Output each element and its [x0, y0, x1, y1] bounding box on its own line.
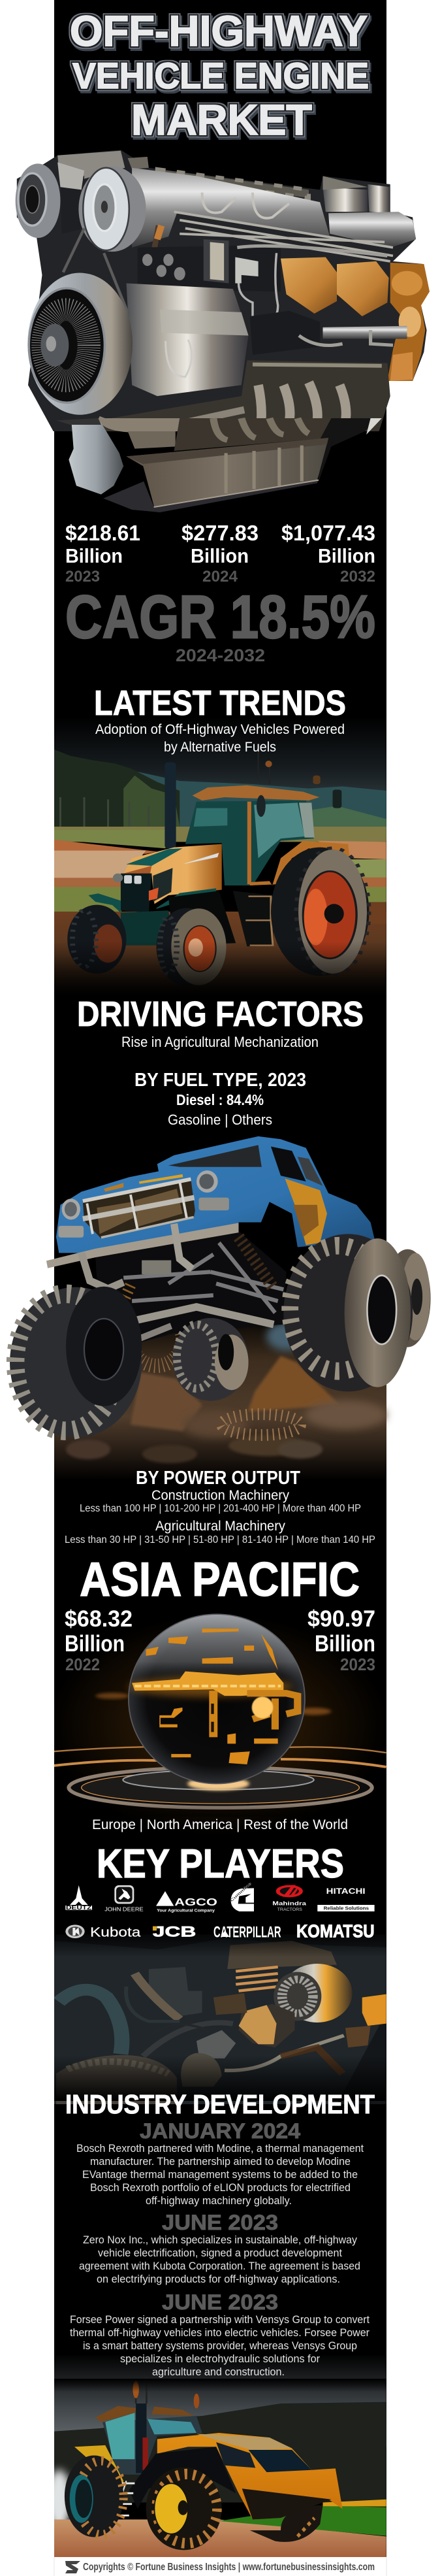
illustration: engine bay close-up: [54, 1928, 386, 2104]
logo: Cummins: [230, 1881, 254, 1911]
development: June 2023 Zero Nox: vehicle electrification, signed a product development: [98, 2247, 342, 2259]
logo: Hitachi: HITACHI: [326, 1887, 366, 1896]
development: January 2024: Bosch Rexroth portfolio of eLION products for electrified: [90, 2181, 351, 2194]
segment: power output: Construction Machinery: [151, 1488, 289, 1503]
stat: asia pacific 2023: Billion: [315, 1631, 375, 1657]
stat: 2032 value: [281, 521, 375, 586]
tractor scene fade: [54, 941, 386, 997]
centre wheel: [172, 1318, 249, 1401]
stat: 2023 value: 2023: [65, 568, 100, 586]
black background panel: [54, 0, 386, 2557]
illustration: yellow tractor on track: [46, 2354, 386, 2557]
heading: asia pacific: ASIA PACIFIC: [80, 1553, 360, 1606]
scene bottom fade: [54, 2055, 386, 2101]
development: June 2023 Zero Nox: Zero Nox Inc., which specializes in sustainable, off-highway: [83, 2234, 357, 2246]
scene top fade: [54, 1934, 386, 1954]
logo: Hitachi: Reliable Solutions: [324, 1907, 369, 1911]
logo: John Deere: [104, 1885, 144, 1913]
segment: fuel type: Diesel : 84.4%: [176, 1091, 264, 1108]
segment: power output: Less than 100 HP | 101-200 HP | 201-400 HP | More than 400 HP: [80, 1503, 361, 1514]
left wheel: [10, 1287, 142, 1438]
stat: asia pacific 2023: $90.97: [307, 1606, 375, 1632]
heading: driving factors: DRIVING FACTORS: [77, 995, 364, 1034]
stat: asia pacific 2023: [307, 1606, 375, 1674]
logo: Caterpillar: CATERPILLAR: [213, 1923, 281, 1941]
development: June 2023 Forsee Power: is a smart battery systems provider, whereas Vensys Group: [83, 2339, 357, 2352]
development: January 2024: Bosch Rexroth partnered with Modine, a thermal management: [76, 2142, 364, 2155]
latest trends subtitle: [95, 722, 345, 755]
title: OFF-HIGHWAY: [70, 7, 368, 55]
rear far wheel: [385, 1249, 431, 1347]
segment: fuel type: [134, 1070, 306, 1128]
logo: AGCO: AGCO: [174, 1897, 217, 1908]
stat: asia pacific 2023: 2023: [340, 1655, 375, 1674]
stat: 2032 value: $1,077.43: [281, 521, 375, 545]
development: June 2023 Zero Nox: agreement with Kubota Corporation. The agreement is based: [79, 2260, 360, 2272]
segment: fuel type: Gasoline | Others: [168, 1112, 272, 1128]
CAGR period: 2024-2032: [176, 646, 265, 665]
logo: JCB: JCB: [153, 1924, 196, 1940]
company logos: [65, 1881, 375, 1941]
left pulley: [16, 163, 60, 238]
top pulley: [78, 167, 146, 252]
development: January 2024: JANUARY 2024: [140, 2119, 300, 2143]
stat: 2023 value: $218.61: [65, 521, 140, 545]
stat: 2024 value: 2024: [202, 568, 238, 586]
illustration: engine: [16, 150, 430, 512]
logo: Mahindra: Mahindra: [272, 1900, 306, 1906]
development: June 2023 Forsee Power: agriculture and construction.: [152, 2366, 285, 2378]
platform fade: [132, 1806, 309, 1810]
development: June 2023 Forsee Power: [70, 2290, 369, 2378]
right wheel: [283, 1234, 413, 1391]
heading: key players: KEY PLAYERS: [97, 1841, 344, 1887]
logo: Deutz: [65, 1885, 92, 1911]
stat: 2023 value: Billion: [65, 544, 123, 567]
logo: Kubota: [65, 1924, 141, 1940]
logo: Mahindra: TRACTORS: [277, 1908, 302, 1912]
stat: 2024 value: $277.83: [181, 521, 259, 545]
stat: asia pacific 2022: 2022: [65, 1655, 100, 1674]
footer: [54, 2557, 386, 2576]
logo: John Deere: JOHN DEERE: [104, 1906, 144, 1913]
development: January 2024: EVantage thermal management systems to be added to the: [82, 2168, 358, 2181]
stat: 2024 value: [181, 521, 259, 586]
illustration: monster truck: [10, 1136, 431, 1438]
driving factors subtitle: Rise in Agricultural Mechanization: [121, 1034, 319, 1050]
illustration: glowing globe: [49, 1614, 388, 1836]
front wheel: [146, 2468, 222, 2550]
stat: asia pacific 2022: Billion: [65, 1631, 125, 1657]
illustration: dirt background: [54, 1313, 386, 1480]
left wheel: [67, 905, 127, 974]
development: January 2024: [76, 2119, 364, 2207]
segment: power output: BY POWER OUTPUT: [136, 1468, 300, 1489]
tractor body: [74, 2377, 343, 2542]
development: June 2023 Forsee Power: Forsee Power signed a partnership with Vensys Group to convert: [70, 2313, 369, 2326]
logo: Mahindra: [272, 1885, 306, 1912]
segment: power output: Agricultural Machinery: [155, 1519, 285, 1534]
scene top fade: [54, 2379, 386, 2392]
logo: Caterpillar: [213, 1923, 281, 1941]
orange blocks: [281, 257, 430, 381]
lower manifolds: [95, 360, 390, 431]
alternator: [274, 1964, 353, 2023]
development: June 2023 Forsee Power: thermal off-highway vehicles into electric vehicles. Forsee Power: [70, 2326, 369, 2339]
housing: [127, 284, 249, 396]
logo: AGCO: Your Agricultural Company: [157, 1908, 215, 1913]
illustration: tractor in field: [54, 730, 386, 985]
heading: industry development: INDUSTRY DEVELOPMENT: [65, 2089, 375, 2119]
stat: 2032 value: Billion: [318, 544, 375, 567]
development: June 2023 Forsee Power: specializes in electrohydraulic solutions for: [120, 2353, 320, 2365]
stat: 2023 value: [65, 521, 140, 586]
title: MARKET: [131, 95, 312, 144]
development: January 2024: manufacturer. The partnership aimed to develop Modine: [90, 2155, 351, 2168]
continents: [132, 1628, 298, 1764]
development: January 2024: off-highway machinery globally.: [146, 2194, 292, 2207]
CAGR figure: CAGR 18.5%: [65, 583, 375, 651]
front wheel: [157, 908, 227, 985]
heading: latest trends: LATEST TRENDS: [94, 684, 346, 723]
stat: asia pacific 2022: [65, 1606, 133, 1674]
rear wheel: [271, 848, 369, 976]
latest trends subtitle: Adoption of Off-Highway Vehicles Powered: [95, 722, 345, 737]
stat: 2032 value: 2032: [340, 568, 375, 586]
latest trends subtitle: by Alternative Fuels: [164, 740, 276, 755]
icon: Fortune Business Insights logo: [65, 2561, 80, 2573]
logo: Kubota: Kubota: [90, 1924, 141, 1940]
logo: Hitachi: [317, 1887, 375, 1911]
logo: Deutz: DEUTZ: [66, 1905, 91, 1911]
development: June 2023 Zero Nox: [79, 2211, 360, 2285]
segment: fuel type: BY FUEL TYPE, 2023: [134, 1070, 306, 1091]
segment: power output: [65, 1468, 375, 1545]
logo: Cummins: Cummins: [230, 1881, 253, 1903]
title: VEHICLE ENGINE: [72, 55, 369, 96]
rear wheel: [65, 2456, 123, 2537]
logo: JCB: [153, 1924, 196, 1940]
tractor: [67, 750, 369, 985]
title: [70, 7, 369, 144]
logo: Komatsu: KOMATSU: [296, 1921, 375, 1941]
chassis: [95, 1231, 287, 1355]
other regions: Europe | North America | Rest of the World: [92, 1817, 348, 1832]
stat: asia pacific 2022: $68.32: [65, 1606, 133, 1632]
development: June 2023 Zero Nox: on electrifying products for off-highway applications.: [97, 2273, 340, 2285]
big pulley: [27, 273, 133, 415]
stat: 2024 value: Billion: [191, 544, 249, 567]
segment: power output: Less than 30 HP | 31-50 HP | 51-80 HP | 81-140 HP | More than 140 HP: [65, 1534, 375, 1545]
development: June 2023 Zero Nox: JUNE 2023: [162, 2211, 278, 2234]
development: June 2023 Forsee Power: JUNE 2023: [162, 2290, 278, 2314]
logo: AGCO: [156, 1891, 217, 1913]
